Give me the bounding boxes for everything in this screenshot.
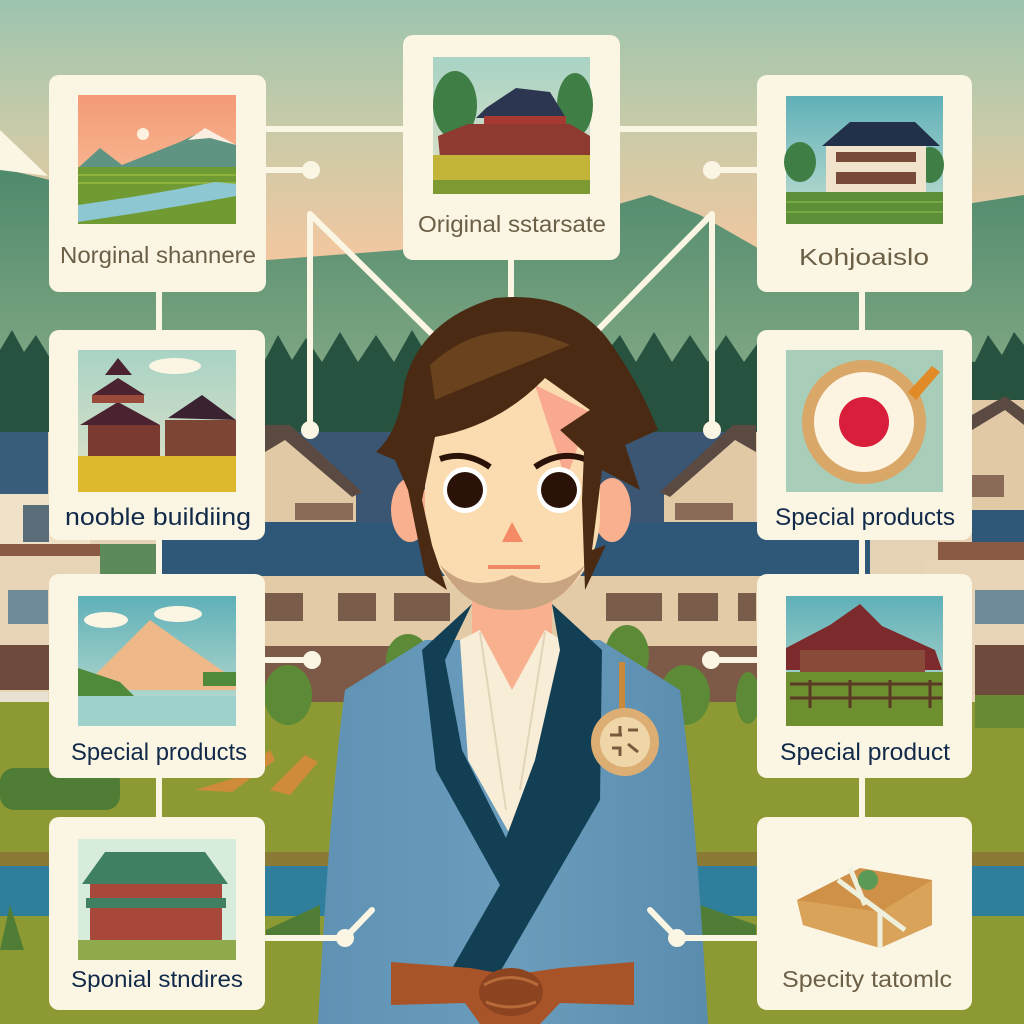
panel: special product farmhouse card <box>757 574 972 778</box>
character <box>318 297 708 1024</box>
badge <box>591 662 659 776</box>
label: Norginal shannere <box>60 242 256 268</box>
roof left wing <box>265 432 755 522</box>
label: Original sstarsate <box>418 211 606 237</box>
face <box>425 360 600 608</box>
panel: noble building card <box>49 330 265 540</box>
scene: manor house <box>784 96 944 224</box>
eyes <box>443 467 487 513</box>
nose and mouth <box>502 522 523 542</box>
panel: special products mountain card <box>49 574 265 778</box>
scene: green roof house <box>78 839 236 960</box>
panel: sponial standires card <box>49 817 265 1010</box>
scene: plate with red disc <box>786 350 943 492</box>
belt <box>391 962 634 1024</box>
scene: red farmhouse <box>786 596 943 726</box>
label: Special products <box>775 504 955 531</box>
robe <box>318 640 708 1024</box>
label: Sponial stndires <box>71 966 243 992</box>
label: Kohjoaislo <box>799 244 929 270</box>
stubble <box>440 565 585 610</box>
connector lines over robe <box>266 910 757 947</box>
label: Special product <box>780 739 950 766</box>
scene: mountain and lake <box>78 596 236 726</box>
scene: sunset rice fields <box>78 95 236 224</box>
label: Special products <box>71 739 247 766</box>
scene: red barn <box>433 57 593 194</box>
scene: pagoda <box>78 350 236 492</box>
scene: wrapped straw bundle <box>797 868 932 948</box>
hair <box>376 297 658 590</box>
panel: Kohjoaislo card <box>757 75 972 292</box>
panel: specialty card <box>757 817 972 1010</box>
panel: original estate card <box>403 35 620 260</box>
inner collar <box>460 630 562 838</box>
panel: special products flag card <box>757 330 972 540</box>
label: Specity tatomlc <box>782 966 952 992</box>
neck <box>472 590 552 690</box>
label: nooble buildiing <box>65 504 251 531</box>
robe collar <box>422 604 602 972</box>
connector lines <box>159 129 862 817</box>
panel: landscape card <box>49 75 266 292</box>
brows <box>440 456 490 467</box>
ears <box>391 478 429 542</box>
